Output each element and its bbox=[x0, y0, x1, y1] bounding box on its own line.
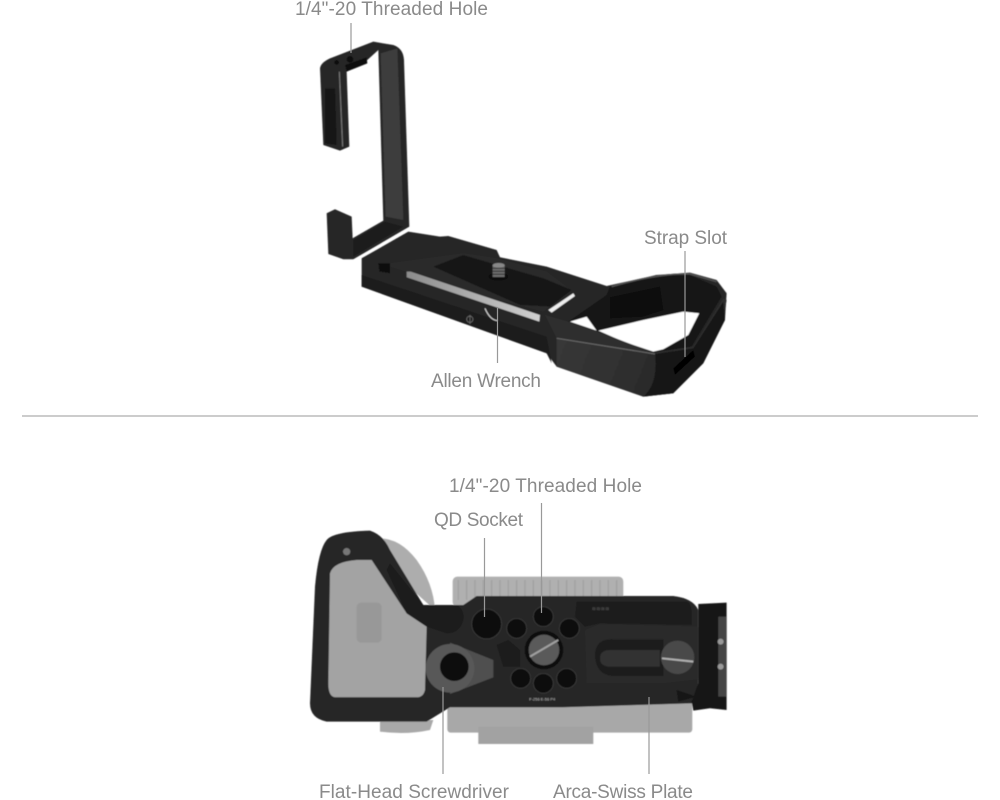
label: strap slot bbox=[644, 228, 728, 357]
centre screw bbox=[525, 631, 563, 669]
label: allen wrench bbox=[431, 308, 541, 392]
flat-head screwdriver disk bbox=[426, 643, 493, 694]
battery door bbox=[328, 560, 427, 697]
product photo: bracket mounted on camera, bottom view: F-256 E-56 P4 bbox=[529, 697, 556, 702]
product photo: bracket mounted on camera, bottom view: ≋≋≋≋ bbox=[592, 607, 609, 613]
base plate body bbox=[362, 232, 727, 397]
strap slot bbox=[673, 350, 695, 375]
product photo: L-bracket angled view bbox=[320, 42, 727, 397]
label: QD socket: QD Socket bbox=[434, 510, 524, 531]
latch bbox=[387, 563, 464, 633]
label: strap slot: Strap Slot bbox=[644, 228, 728, 249]
label: QD socket bbox=[434, 510, 524, 617]
holes group bbox=[472, 607, 579, 693]
label: arca-swiss plate bbox=[553, 697, 693, 800]
label: bottom threaded hole: 1/4"-20 Threaded Hole bbox=[449, 476, 642, 497]
product photo: bracket mounted on camera, bottom view bbox=[310, 531, 727, 744]
top face plate bbox=[390, 253, 570, 312]
right end block bbox=[677, 603, 727, 711]
grip window bbox=[568, 275, 722, 353]
grip top face bbox=[545, 298, 727, 370]
tripod screw bbox=[488, 263, 508, 281]
arca-swiss clamp bbox=[585, 624, 698, 683]
upright frame bbox=[320, 42, 409, 259]
label: allen wrench: Allen Wrench bbox=[431, 371, 541, 392]
bracket plate bbox=[310, 531, 698, 722]
allen wrench strip bbox=[407, 272, 540, 322]
QD socket bbox=[472, 609, 502, 639]
grip front face bbox=[557, 338, 673, 397]
camera body in grey bbox=[380, 538, 692, 744]
